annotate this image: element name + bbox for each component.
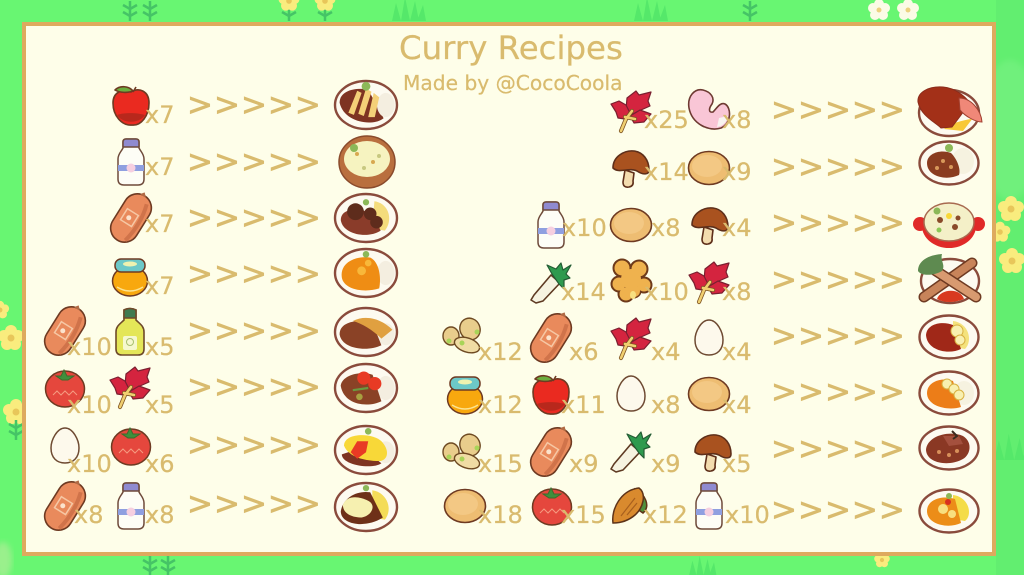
ingredient: milk x8 — [118, 483, 174, 529]
recipe 8 left — [39, 474, 397, 535]
ingredient: potato x4: x4 — [722, 391, 751, 419]
ingredient: leek x9: x9 — [651, 450, 680, 478]
ingredient: garlic x15: x15 — [478, 450, 523, 478]
arrow chevrons: >>>>> — [187, 427, 322, 463]
recipe 3 left — [105, 186, 397, 247]
ingredient: potato x4 — [688, 378, 751, 419]
dish: egg honey curry — [920, 372, 978, 414]
ingredient: potato x9: x9 — [722, 158, 751, 186]
ingredient: tomato x15: x15 — [561, 501, 606, 529]
ingredient: red leaf x4: x4 — [651, 338, 680, 366]
ingredient: milk x10: x10 — [562, 214, 607, 242]
dish: stew pot — [913, 203, 985, 248]
dish: meatball curry — [335, 194, 397, 242]
ingredient: tomato x6 — [112, 428, 174, 478]
recipe 8 right — [444, 483, 978, 532]
ingredient: egg x4 — [695, 320, 751, 366]
arrow chevrons: >>>>> — [187, 87, 322, 123]
dish: sausage and leek curry — [918, 254, 979, 303]
ingredient: sausage x6 — [525, 306, 598, 367]
ingredient: potato x8 — [610, 208, 680, 242]
ingredient: red leaf x25: x25 — [644, 106, 689, 134]
recipe 6 left — [46, 364, 397, 419]
dish: cutlet curry — [335, 308, 397, 356]
ingredient: garlic x12: x12 — [478, 338, 523, 366]
ingredient: tomato x6: x6 — [145, 450, 174, 478]
recipe 5 right — [443, 306, 978, 367]
ingredient: egg x4: x4 — [722, 338, 751, 366]
ingredient: sausage x7: x7 — [145, 210, 174, 238]
ingredient: potato x18: x18 — [478, 501, 523, 529]
dish: cheese curry — [335, 483, 397, 531]
arrow chevrons: >>>>> — [771, 262, 906, 298]
ingredient: sausage x8: x8 — [74, 501, 103, 529]
arrow chevrons: >>>>> — [771, 492, 906, 528]
ingredient: potato x8: x8 — [651, 214, 680, 242]
ingredient: apple x7: x7 — [145, 101, 174, 129]
ingredient: red leaf x5 — [110, 367, 174, 419]
ingredient: sausage x10: x10 — [67, 333, 112, 361]
ingredient: egg x8 — [617, 376, 680, 419]
dish: mushroom curry — [920, 142, 978, 184]
arrow chevrons: >>>>> — [187, 144, 322, 180]
arrow chevrons: >>>>> — [771, 318, 906, 354]
ingredient: apple x11: x11 — [561, 391, 606, 419]
ingredient: potato x9 — [688, 152, 751, 186]
dish: meat curry — [920, 426, 978, 470]
ingredient: sausage x9: x9 — [569, 450, 598, 478]
arrow chevrons: >>>>> — [187, 313, 322, 349]
ingredient: red leaf x4 — [611, 318, 680, 366]
ingredient: mushroom x4 — [692, 208, 751, 244]
ingredient: milk x7: x7 — [145, 153, 174, 181]
dish: apple curry — [335, 81, 397, 129]
recipe 1 left — [113, 81, 397, 129]
recipe 7 right — [443, 420, 978, 481]
title: Curry Recipes — [399, 29, 623, 67]
ingredient: milk x10 — [696, 483, 770, 529]
dish: honey curry — [335, 249, 397, 297]
ingredient: pink bean x8: x8 — [722, 106, 751, 134]
recipe 6 right — [448, 372, 978, 419]
recipe 3 right — [538, 202, 985, 248]
ingredient: sausage x10 — [39, 299, 112, 361]
ingredient: garlic x12 — [443, 315, 523, 366]
ingredient: apple x11 — [533, 376, 606, 419]
recipe 4 right — [531, 254, 979, 306]
ingredient: tomato x10 — [46, 370, 112, 419]
recipe 4 left — [112, 249, 397, 300]
ingredient: honey x12: x12 — [478, 391, 523, 419]
ingredient: apple x7 — [113, 87, 174, 129]
ingredient: sausage x8 — [39, 474, 103, 535]
dish: egg beef curry — [920, 316, 978, 358]
ingredient: milk x8: x8 — [145, 501, 174, 529]
ingredient: sausage x9 — [525, 420, 598, 481]
arrow chevrons: >>>>> — [771, 374, 906, 410]
ingredient: honey x7: x7 — [145, 272, 174, 300]
ingredient: mushroom x5 — [695, 435, 751, 478]
subtitle: author credit: Made by @CocoCoola — [403, 71, 622, 95]
recipe 2 left — [118, 136, 395, 188]
arrow chevrons: >>>>> — [187, 200, 322, 236]
ingredient: potato x18 — [444, 490, 523, 529]
ingredient: milk x7 — [118, 139, 174, 185]
arrow chevrons: >>>>> — [187, 369, 322, 405]
ingredient: mushroom x14 — [613, 151, 689, 187]
recipe 5 left — [39, 299, 397, 361]
ingredient: tomato x10: x10 — [67, 391, 112, 419]
arrow chevrons: >>>>> — [187, 486, 322, 522]
arrow chevrons: >>>>> — [771, 149, 906, 185]
ingredient: leek x14 — [531, 263, 606, 306]
dish: steak curry — [918, 87, 982, 136]
ingredient: red leaf x8: x8 — [722, 278, 751, 306]
arrow chevrons: >>>>> — [771, 205, 906, 241]
ingredient: ginger x10 — [612, 260, 689, 306]
ingredient: nut x12 — [613, 488, 688, 529]
ingredient: red leaf x5: x5 — [145, 391, 174, 419]
arrow chevrons: >>>>> — [187, 256, 322, 292]
dish: omelet curry — [335, 426, 397, 474]
ingredient: garlic x15 — [443, 431, 523, 478]
ingredient: egg x8: x8 — [651, 391, 680, 419]
dish: tomato curry — [335, 364, 397, 412]
ingredient: milk x10: x10 — [725, 501, 770, 529]
ingredient: sausage x6: x6 — [569, 338, 598, 366]
ingredient: nut x12: x12 — [643, 501, 688, 529]
arrow chevrons: >>>>> — [771, 92, 906, 128]
ingredient: mushroom x14: x14 — [644, 158, 689, 186]
recipe 1 right — [611, 87, 982, 136]
ingredient: egg x10 — [51, 428, 112, 478]
ingredient: milk x10 — [538, 202, 607, 248]
ingredient: mushroom x5: x5 — [722, 450, 751, 478]
ingredient: egg x10: x10 — [67, 450, 112, 478]
ingredient: mushroom x4: x4 — [722, 214, 751, 242]
ingredient: oil x5: x5 — [145, 333, 174, 361]
ingredient: sausage x7 — [105, 186, 174, 247]
recipe 2 right — [613, 142, 978, 187]
arrow chevrons: >>>>> — [771, 431, 906, 467]
ingredient: pink bean x8 — [689, 90, 751, 134]
ingredient: ginger x10: x10 — [644, 278, 689, 306]
ingredient: oil x5 — [116, 308, 174, 361]
ingredient: red leaf x25 — [611, 91, 689, 134]
dish: cream curry bowl — [339, 136, 395, 188]
dish: vegetable curry — [920, 490, 978, 532]
ingredient: tomato x15 — [532, 488, 606, 529]
ingredient: leek x9 — [611, 432, 680, 478]
ingredient: honey x7 — [112, 259, 174, 300]
ingredient: leek x14: x14 — [561, 278, 606, 306]
ingredient: red leaf x8 — [689, 262, 751, 306]
recipe 7 left — [51, 426, 397, 478]
ingredient: honey x12 — [448, 377, 523, 419]
